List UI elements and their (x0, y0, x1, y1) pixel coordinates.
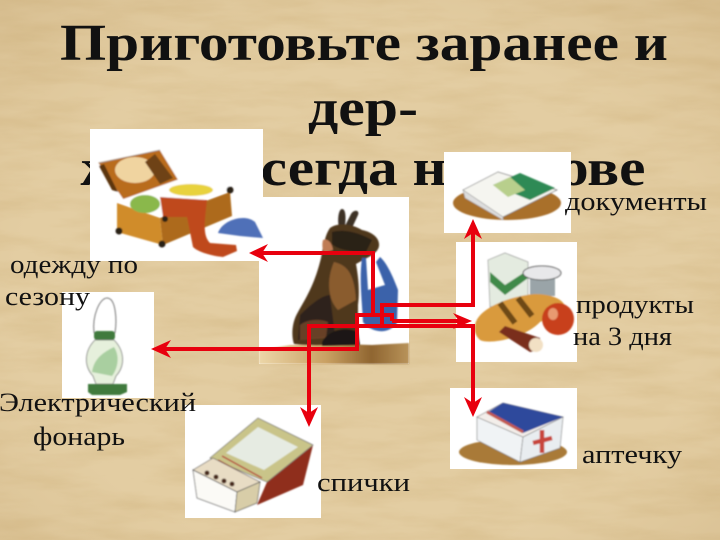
illustration: documents (444, 152, 571, 233)
title: Приготовьте заранее и (60, 15, 668, 72)
arrow: dog to food (392, 313, 472, 329)
label: clothes: сезону (5, 282, 90, 311)
label: first aid kit: аптечку (582, 440, 682, 469)
illustration: lantern (62, 292, 154, 398)
title: дер- (308, 80, 418, 137)
label: clothes: одежду по (10, 250, 138, 279)
arrow: dog to lantern (151, 315, 392, 358)
title: жите всегда наготове (80, 140, 646, 197)
arrow: dog to first aid kit (382, 326, 482, 417)
label: electric lantern (0, 388, 196, 451)
illustration: first aid kit (450, 388, 577, 469)
label: matches: спички (317, 468, 410, 497)
illustration: food supplies (456, 242, 577, 362)
arrow: dog to matches (300, 326, 382, 427)
arrow: dog to documents (382, 219, 482, 327)
arrow: dog to suitcase clothes (249, 244, 373, 315)
illustration: matchbox (185, 405, 321, 518)
label: food: на 3 дня (573, 322, 672, 351)
label: clothes (5, 250, 138, 311)
label: food (573, 290, 694, 351)
label: food: продукты (576, 290, 694, 319)
label: documents: документы (565, 187, 707, 216)
illustration: open suitcase with clothes (90, 129, 263, 261)
illustration: dog with bag (259, 197, 409, 364)
label: electric lantern: фонарь (33, 422, 125, 451)
title (60, 15, 668, 197)
label: electric lantern: Электрический (0, 388, 196, 417)
